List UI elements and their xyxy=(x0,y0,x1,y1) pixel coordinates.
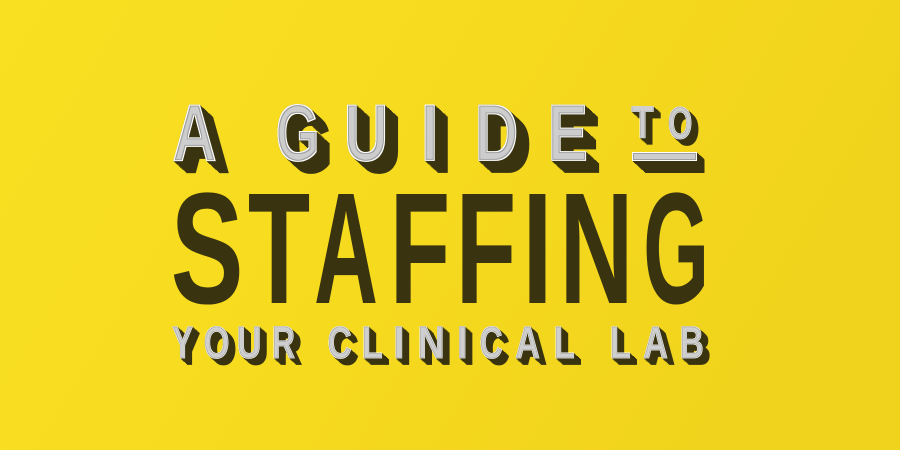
heading: YOUR CLINICAL LAB: C xyxy=(327,318,352,368)
heading: STAFFING xyxy=(171,159,709,338)
heading: STAFFING: T xyxy=(248,160,310,337)
heading: YOUR CLINICAL LAB: C xyxy=(480,319,503,368)
heading: A GUIDE: U xyxy=(344,89,389,178)
heading: YOUR CLINICAL LAB: U xyxy=(237,319,262,368)
heading: YOUR CLINICAL LAB: I xyxy=(457,317,468,368)
heading: A GUIDE: A xyxy=(172,89,217,178)
underline beneath TO xyxy=(632,152,697,161)
heading: STAFFING: A xyxy=(314,161,378,338)
heading: YOUR CLINICAL LAB: O xyxy=(204,318,230,368)
heading: A GUIDE: E xyxy=(548,88,588,179)
heading: A GUIDE xyxy=(172,87,588,179)
heading: YOUR CLINICAL LAB: L xyxy=(554,318,575,368)
heading: A GUIDE: G xyxy=(275,88,320,178)
heading: A GUIDE: D xyxy=(474,88,519,179)
heading: YOUR CLINICAL LAB: Y xyxy=(172,319,193,368)
heading: TO: O xyxy=(668,99,692,149)
heading: STAFFING: I xyxy=(522,159,553,337)
heading: YOUR CLINICAL LAB: A xyxy=(643,318,668,368)
heading: STAFFING: F xyxy=(456,160,516,337)
heading: STAFFING: F xyxy=(390,160,450,337)
heading: YOUR CLINICAL LAB: N xyxy=(417,317,445,368)
heading: STAFFING: N xyxy=(560,160,633,337)
heading: A GUIDE: I xyxy=(420,87,439,178)
heading: TO: T xyxy=(631,98,654,148)
heading: STAFFING: G xyxy=(643,160,709,337)
heading: YOUR CLINICAL LAB: L xyxy=(362,318,383,368)
heading: YOUR CLINICAL LAB: L xyxy=(610,318,631,368)
heading: TO xyxy=(631,98,692,149)
heading: YOUR CLINICAL LAB: R xyxy=(272,318,295,368)
heading: YOUR CLINICAL LAB: I xyxy=(393,319,405,368)
heading: STAFFING: S xyxy=(171,160,244,337)
poster xyxy=(172,104,710,366)
heading: YOUR CLINICAL LAB xyxy=(172,317,704,368)
heading: YOUR CLINICAL LAB: A xyxy=(515,318,540,368)
heading: YOUR CLINICAL LAB: B xyxy=(680,318,704,368)
